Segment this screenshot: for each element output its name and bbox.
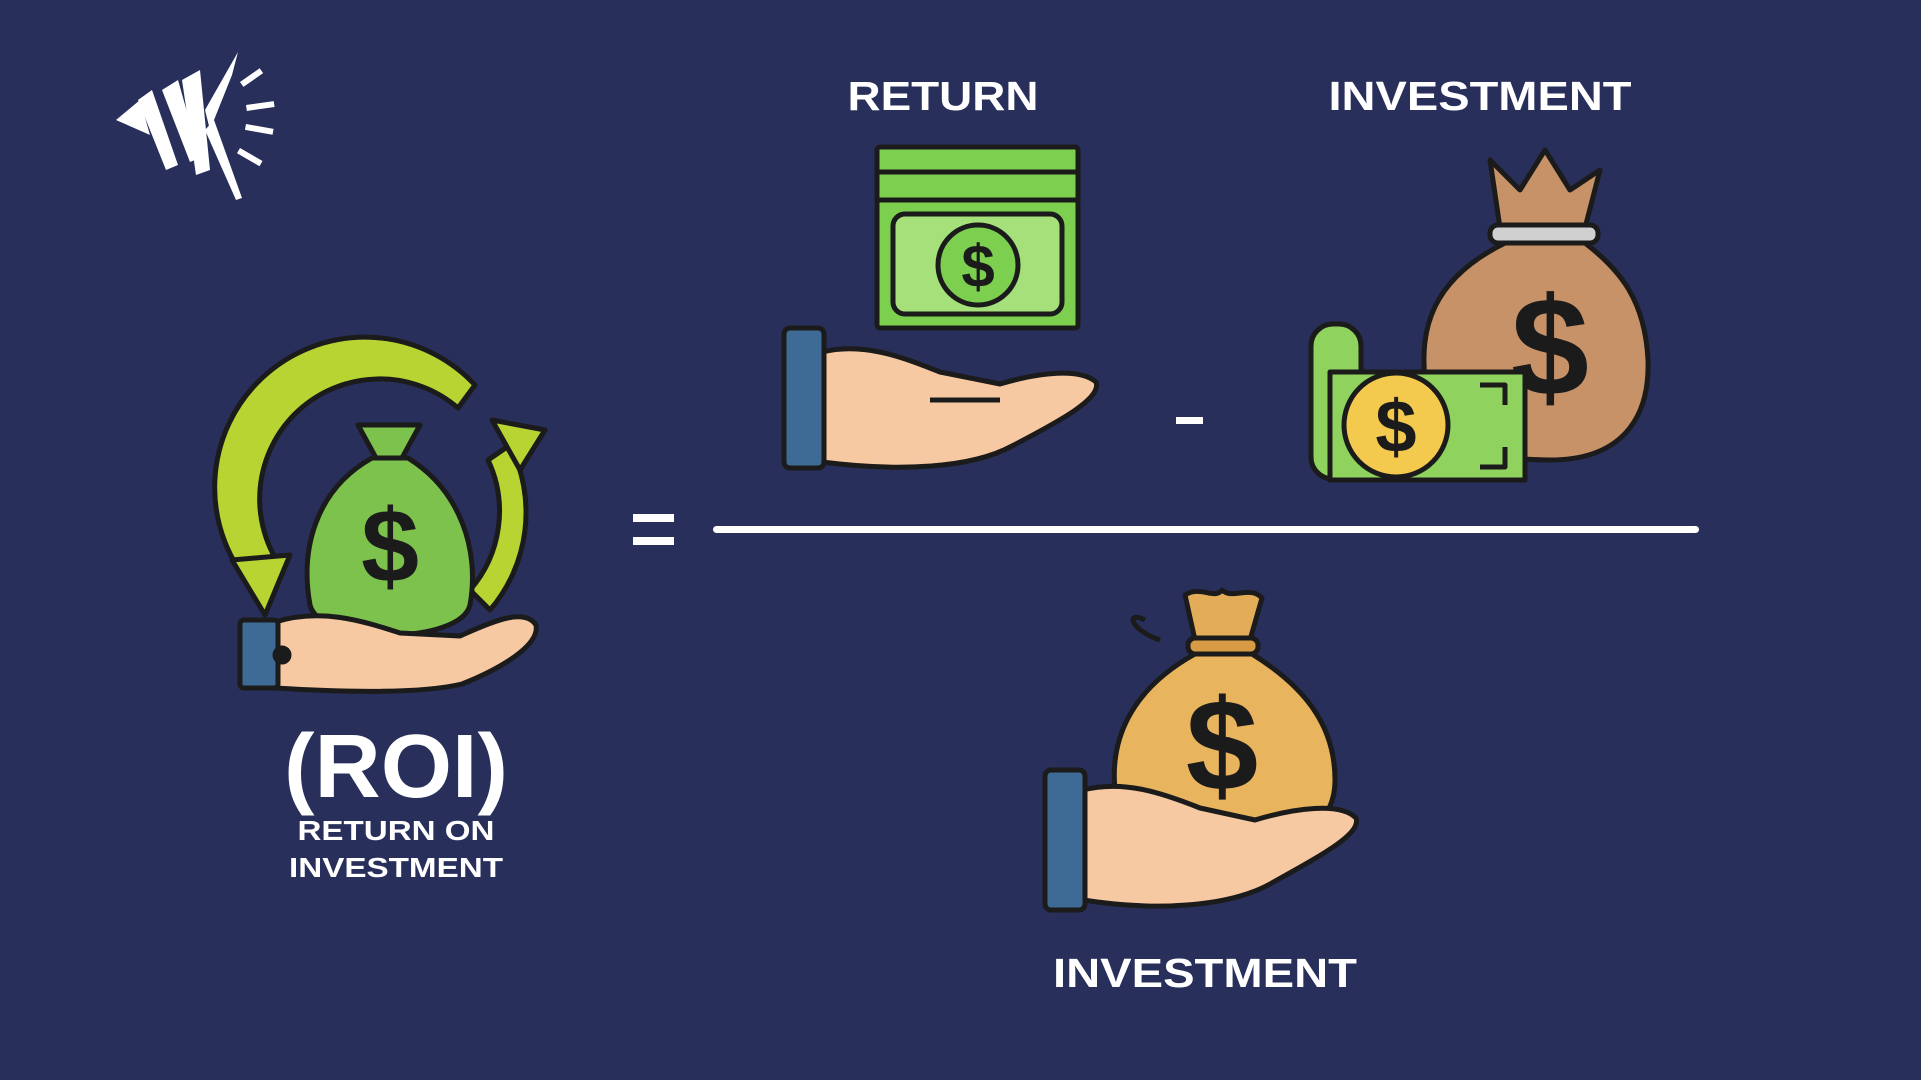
icon: hand receiving cash <box>784 328 1097 468</box>
icon: investment bag with hand: $ <box>1186 672 1258 818</box>
icon: cash stack <box>877 147 1078 328</box>
subtitle: return on investment: INVESTMENT <box>289 852 503 883</box>
logo <box>116 52 275 200</box>
icon: ROI cycle <box>215 337 545 691</box>
minus sign <box>1176 417 1203 424</box>
icon: investment bag with hand <box>1045 590 1357 910</box>
icon: cash stack: $ <box>961 233 995 300</box>
icon: brown money bag <box>1424 150 1648 460</box>
label: investment bottom: INVESTMENT <box>1053 950 1357 996</box>
heading: investment top: INVESTMENT <box>1328 73 1632 119</box>
subtitle: return on investment: RETURN ON <box>298 815 494 846</box>
equals sign <box>633 514 674 545</box>
icon: ROI cycle: $ <box>361 489 419 605</box>
icon: brown money bag: $ <box>1511 268 1589 425</box>
icon: green bill with coin: $ <box>1375 385 1417 468</box>
heading: return: RETURN <box>848 73 1038 119</box>
title: ROI: (ROI) <box>284 717 508 817</box>
fraction line <box>713 526 1699 533</box>
icon: green bill with coin <box>1311 324 1525 480</box>
subtitle: return on investment <box>289 815 503 883</box>
